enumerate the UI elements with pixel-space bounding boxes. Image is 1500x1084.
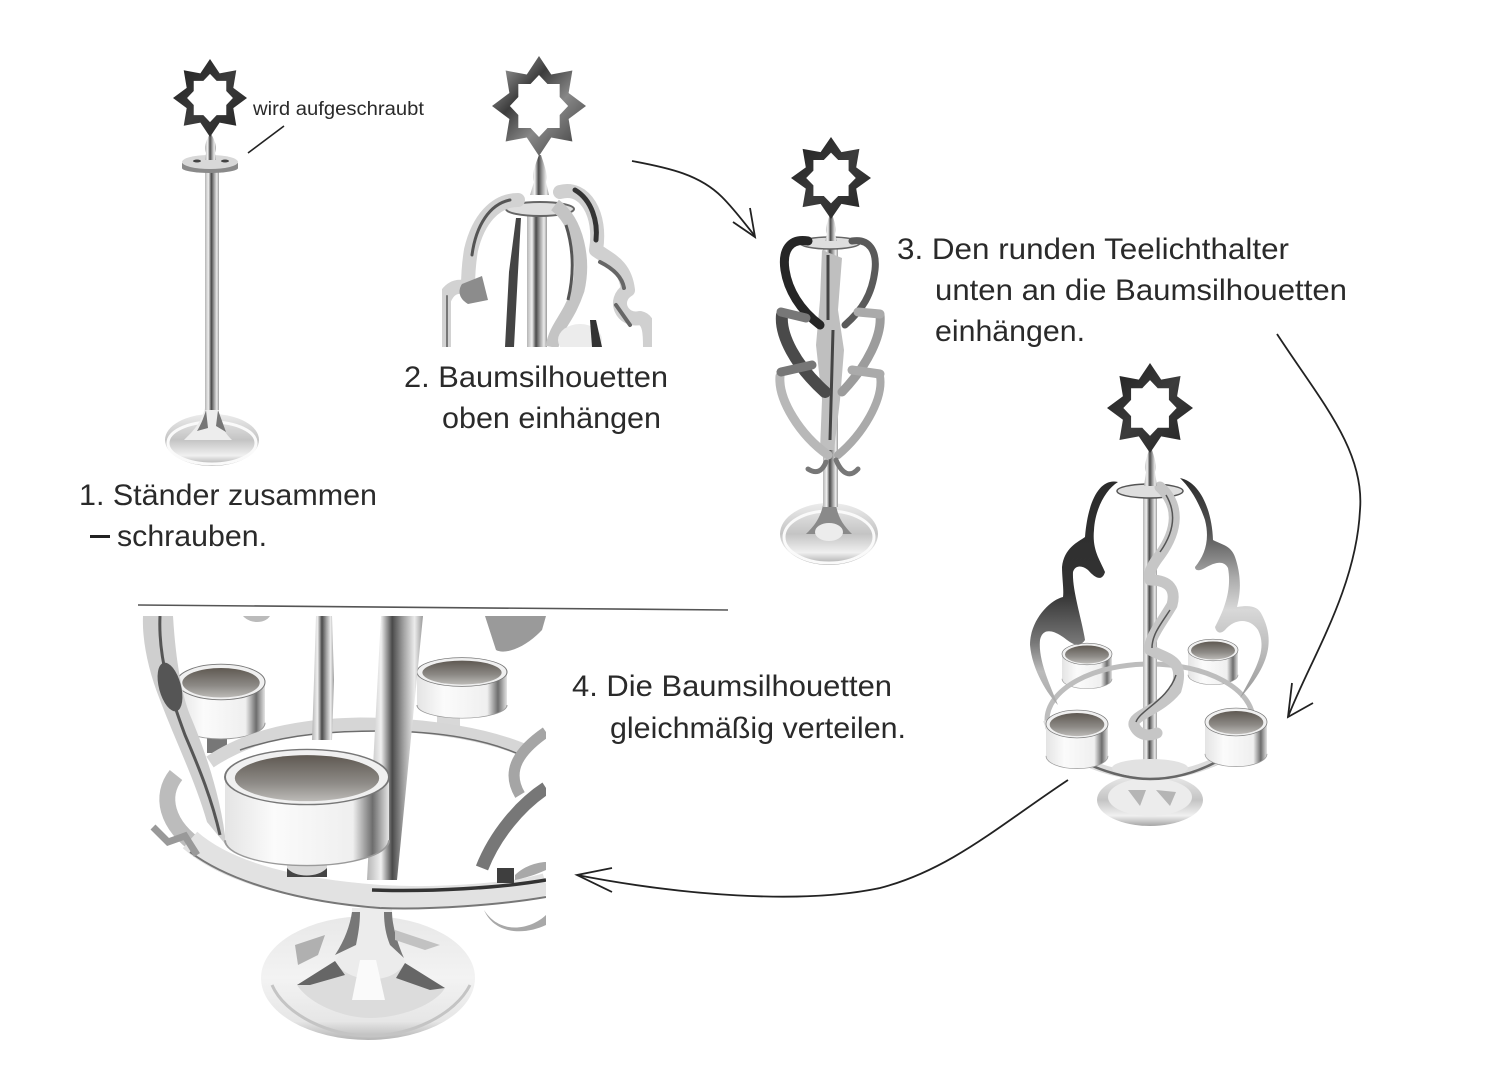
dark joint bbox=[497, 868, 514, 883]
star bbox=[173, 59, 247, 137]
arrow: step 2 to 3 bbox=[632, 161, 755, 237]
bottom hooks bbox=[808, 460, 858, 474]
star bbox=[791, 137, 871, 219]
left silhouette bbox=[1030, 482, 1118, 705]
top nub bbox=[243, 616, 270, 622]
base bbox=[780, 503, 878, 565]
ring back bbox=[210, 724, 528, 762]
step 4 caption: 4. Die Baumsilhouetten bbox=[572, 670, 892, 703]
top disc bbox=[182, 155, 238, 173]
step 1: assembled stand photo bbox=[165, 59, 259, 466]
blob left bbox=[460, 276, 488, 304]
right bowl bbox=[484, 862, 546, 931]
divider line above close-up photo bbox=[138, 605, 728, 610]
back-left cup bbox=[177, 664, 265, 753]
star bbox=[492, 56, 586, 156]
step 2 caption: oben einhängen bbox=[442, 402, 661, 435]
left ring part bbox=[167, 775, 200, 848]
step 1 caption bbox=[79, 479, 377, 553]
front tealight cups bbox=[1046, 708, 1267, 769]
top disc bbox=[506, 202, 574, 216]
silhouette right bbox=[560, 190, 650, 347]
infographic: assembly instructions bbox=[81, 56, 1362, 1040]
back-right cup bbox=[417, 658, 507, 732]
silhouette inner bbox=[552, 205, 581, 347]
ring front bbox=[190, 840, 546, 897]
stand tube bbox=[205, 172, 219, 410]
arrow: step 4 to close-up bbox=[577, 780, 1068, 897]
center strip bbox=[505, 218, 521, 347]
central tube bbox=[367, 616, 423, 880]
right loops bbox=[838, 241, 880, 455]
pedestal base bbox=[1097, 774, 1203, 826]
callout: wird aufgeschraubt bbox=[248, 99, 425, 153]
step 2 caption bbox=[404, 361, 668, 435]
dark oval bbox=[158, 662, 182, 712]
finial bbox=[1144, 450, 1157, 486]
step 4 caption bbox=[572, 670, 906, 745]
close-up photo: holder and silhouettes bbox=[143, 616, 546, 1040]
right loop bbox=[514, 732, 546, 795]
finial bbox=[205, 134, 216, 160]
central tube bbox=[1143, 490, 1157, 770]
finial bbox=[530, 155, 549, 195]
step 2 caption: 2. Baumsilhouetten bbox=[404, 361, 668, 394]
center strip bbox=[312, 616, 334, 740]
step 3 caption: 3. Den runden Teelichthalter bbox=[897, 233, 1289, 266]
star bbox=[1107, 363, 1193, 453]
step 3 caption bbox=[897, 233, 1347, 348]
back tealight cups bbox=[1062, 639, 1238, 689]
step 3 caption: unten an die Baumsilhouetten bbox=[935, 274, 1347, 307]
step 4: complete tree with tealight holder bbox=[1030, 363, 1269, 826]
left loops bbox=[780, 241, 828, 455]
callout: wird aufgeschraubt: wird aufgeschraubt bbox=[252, 99, 425, 120]
finial bbox=[825, 214, 837, 241]
left hook bbox=[153, 827, 197, 855]
top disc bbox=[800, 237, 860, 249]
right silhouette bbox=[1180, 478, 1269, 698]
step 3: stand with silhouettes bbox=[780, 137, 880, 565]
left arm bbox=[143, 616, 226, 845]
foot bbox=[261, 908, 475, 1040]
lower bulb bbox=[558, 324, 602, 347]
top disc bbox=[1117, 484, 1183, 498]
stem under big cup bbox=[287, 866, 327, 876]
stand base bbox=[165, 408, 259, 466]
central tube bbox=[527, 212, 547, 352]
center silhouettes bbox=[816, 250, 844, 450]
silhouette left bbox=[444, 200, 518, 347]
step 1 caption: schrauben. bbox=[117, 520, 267, 553]
top leaf bbox=[485, 616, 546, 652]
ring bbox=[1047, 664, 1253, 776]
step 1 caption: 1. Ständer zusammen bbox=[79, 479, 377, 512]
step 4 caption: gleichmäßig verteilen. bbox=[610, 712, 906, 745]
big front cup bbox=[225, 749, 389, 866]
center ribbon bbox=[1134, 487, 1179, 735]
tube bbox=[823, 247, 838, 507]
step 3 caption: einhängen. bbox=[935, 315, 1085, 348]
right arm bbox=[482, 788, 546, 868]
step 2: cropped photo of hanging silhouettes bbox=[444, 56, 650, 356]
arrow: step 3 to 4 bbox=[1277, 334, 1360, 717]
